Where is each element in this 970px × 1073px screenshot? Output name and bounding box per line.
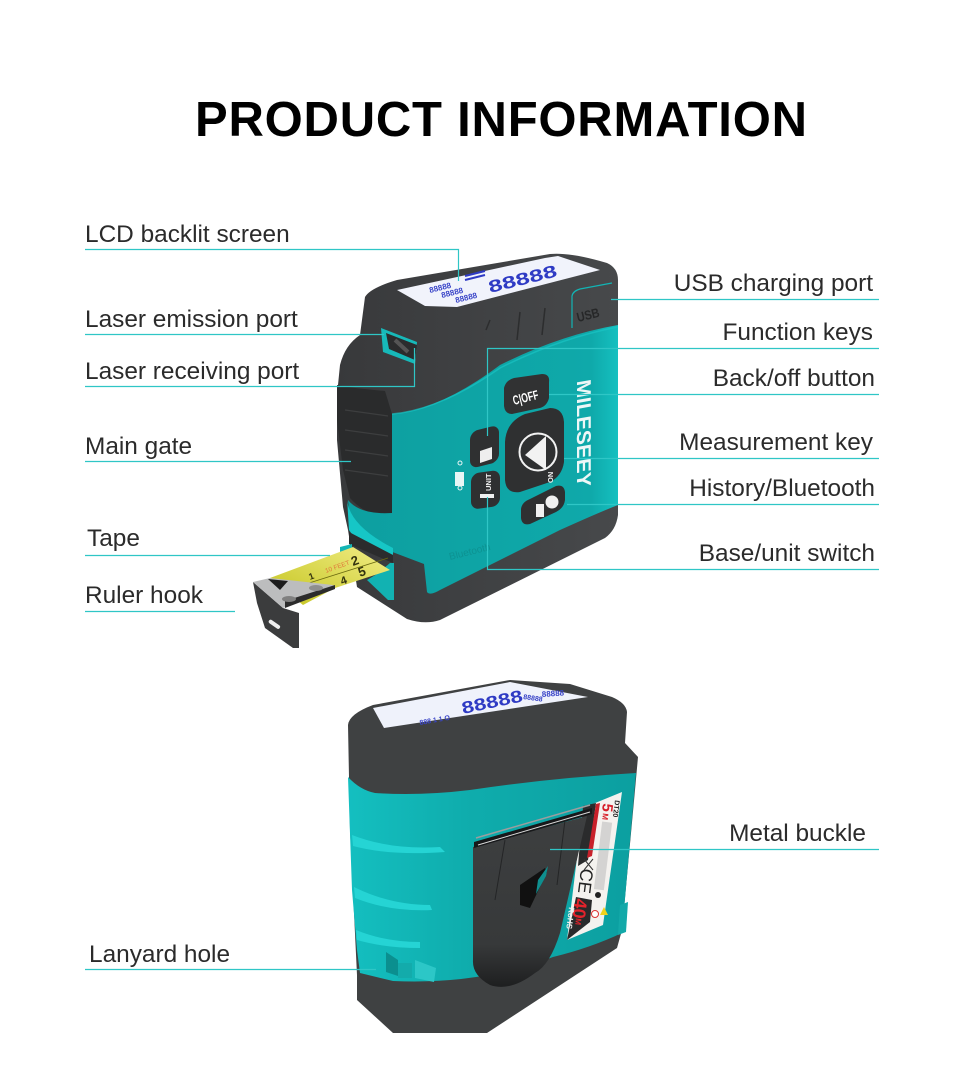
back LCD screen: 88888 [542,688,565,699]
side clip [618,902,628,935]
product label: M [600,813,610,821]
label: Base/unit switch [488,497,879,570]
USB port cover: USB [575,305,601,325]
product label: CE [574,868,597,895]
ruler tape: 5 [356,563,368,580]
unit button: UNIT [484,473,493,491]
metal buckle [473,805,592,987]
body dark shell [337,254,618,622]
label: USB charging port: USB charging port [674,270,873,297]
back teal panel [348,773,636,982]
label: Laser emission port: Laser emission port [85,306,298,333]
label: Lanyard hole: Lanyard hole [89,941,230,968]
battery icon [455,461,464,490]
ruler tape [270,547,390,605]
label: Measurement key: Measurement key [679,429,874,456]
LCD screen: 88888 [428,281,453,295]
history and bluetooth button [521,486,565,524]
base button [470,425,499,469]
product label: 40 [569,898,591,920]
ruler hook [253,578,335,648]
brand name: MILESEEY [572,378,594,489]
label: Metal buckle: Metal buckle [729,820,866,847]
unit button [471,470,500,510]
device: tape measure front view [253,254,618,648]
label: Function keys: Function keys [723,319,873,346]
label: LCD backlit screen: LCD backlit screen [85,221,290,248]
ruler tape: 4 [339,574,350,588]
back LCD screen: 88888 [523,694,543,704]
title: PRODUCT INFORMATION [195,93,807,147]
C/OFF button: C|OFF [511,387,540,408]
product label: RoHS [564,907,576,930]
ruler tape: 10 FEET [324,560,351,575]
lanyard hole [386,952,436,982]
grip ridges [486,308,545,340]
label: Laser receiving port: Laser receiving port [85,358,299,385]
label: Back/off button: Back/off button [713,365,875,392]
label: Function keys [488,319,879,436]
measurement key [505,408,564,492]
label: Ruler hook: Ruler hook [85,582,204,609]
LCD screen: 88888 [486,262,559,297]
label: Main gate: Main gate [85,433,192,460]
teal side panel [348,325,618,594]
product label: DT20 [611,800,620,818]
back LCD screen: 88888 [460,686,524,718]
product label [564,792,622,940]
device: tape measure back view [348,680,638,1033]
label: LCD backlit screen [85,221,458,281]
label: Tape: Tape [87,525,140,552]
ruler tape: 1 [307,571,315,582]
LCD screen [397,256,600,307]
back dark shell [348,680,638,1033]
laser ports [381,328,417,364]
USB port cover [572,283,612,328]
label: Base/unit switch: Base/unit switch [699,540,875,567]
embossed grip text: Bluetooth [448,542,492,563]
label: History/Bluetooth: History/Bluetooth [689,475,875,502]
tape slot [340,532,394,600]
back LCD screen [373,682,588,728]
ruler tape: 2 [349,552,361,569]
C/OFF button [504,374,549,414]
product label: 5 [598,803,616,813]
product label: M [573,918,583,926]
measurement key: ON [546,472,555,483]
label: Laser receiving port [85,348,414,386]
LCD screen: 88888 [454,291,479,305]
LCD screen: 88888 [440,286,465,300]
back LCD screen: 888 1 1 O [419,715,451,727]
